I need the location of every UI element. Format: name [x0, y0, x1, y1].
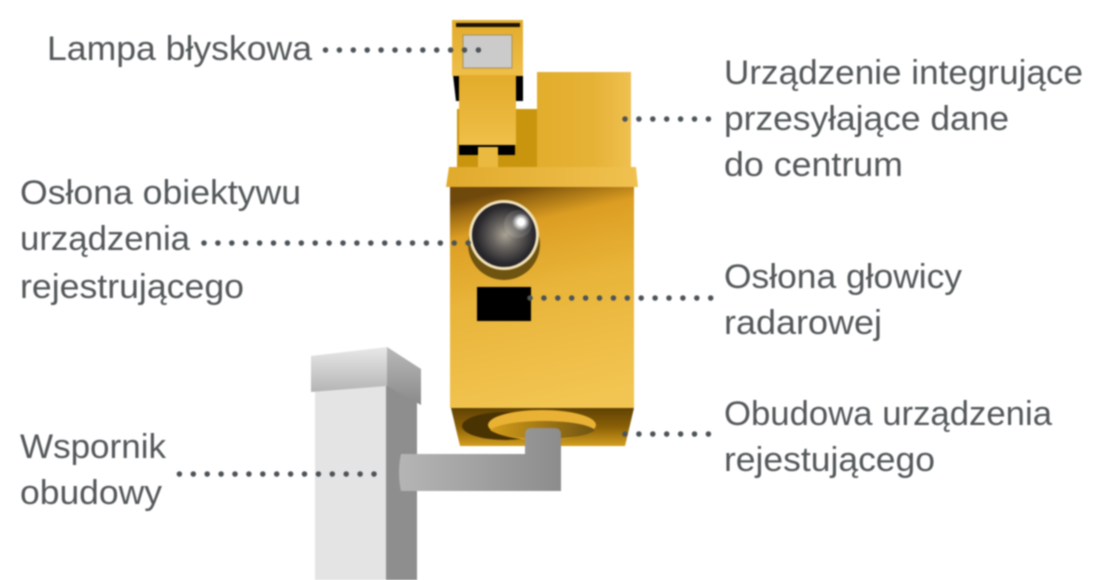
label: lens cover: rejestrującego: [20, 268, 244, 306]
label: recorder housing: rejestującego: [724, 441, 935, 479]
housing roof: [446, 167, 638, 187]
label: data transmission unit: [724, 54, 1083, 184]
dotted leader: bracket: [179, 471, 380, 477]
lens cover: [468, 200, 540, 280]
dotted leader: lens cover: [204, 240, 472, 246]
housing underside: [451, 408, 634, 446]
label: recorder housing: [724, 395, 1052, 479]
label: housing bracket: obudowy: [20, 474, 162, 512]
dotted leader: flash lamp: [326, 47, 480, 53]
label: radar head cover: Osłona głowicy: [724, 258, 962, 296]
label: housing bracket: [20, 428, 167, 512]
label: lens cover: [20, 174, 301, 306]
bracket arm: [399, 428, 561, 491]
label: data transmission unit: Urządzenie integrujące: [724, 54, 1083, 92]
support post: [311, 347, 421, 580]
data transmission unit: [537, 72, 631, 167]
flash lamp: [452, 20, 539, 168]
housing body: [450, 186, 634, 446]
label: housing bracket: Wspornik: [20, 428, 167, 466]
dotted leader: recorder housing: [625, 431, 710, 437]
label: radar head cover: [724, 258, 962, 342]
radar head cover: [477, 287, 531, 321]
dotted leader: radar head: [530, 295, 712, 301]
label: lens cover: Osłona obiektywu: [20, 174, 301, 212]
label: lens cover: urządzenia: [20, 220, 190, 258]
label: data transmission unit: do centrum: [724, 146, 903, 184]
label: flash lamp: Lampa błyskowa: [47, 30, 312, 68]
dotted leader: data unit: [625, 116, 710, 122]
label: data transmission unit: przesyłające dane: [724, 100, 1009, 138]
label: recorder housing: Obudowa urządzenia: [724, 395, 1052, 433]
label: radar head cover: radarowej: [724, 304, 882, 342]
